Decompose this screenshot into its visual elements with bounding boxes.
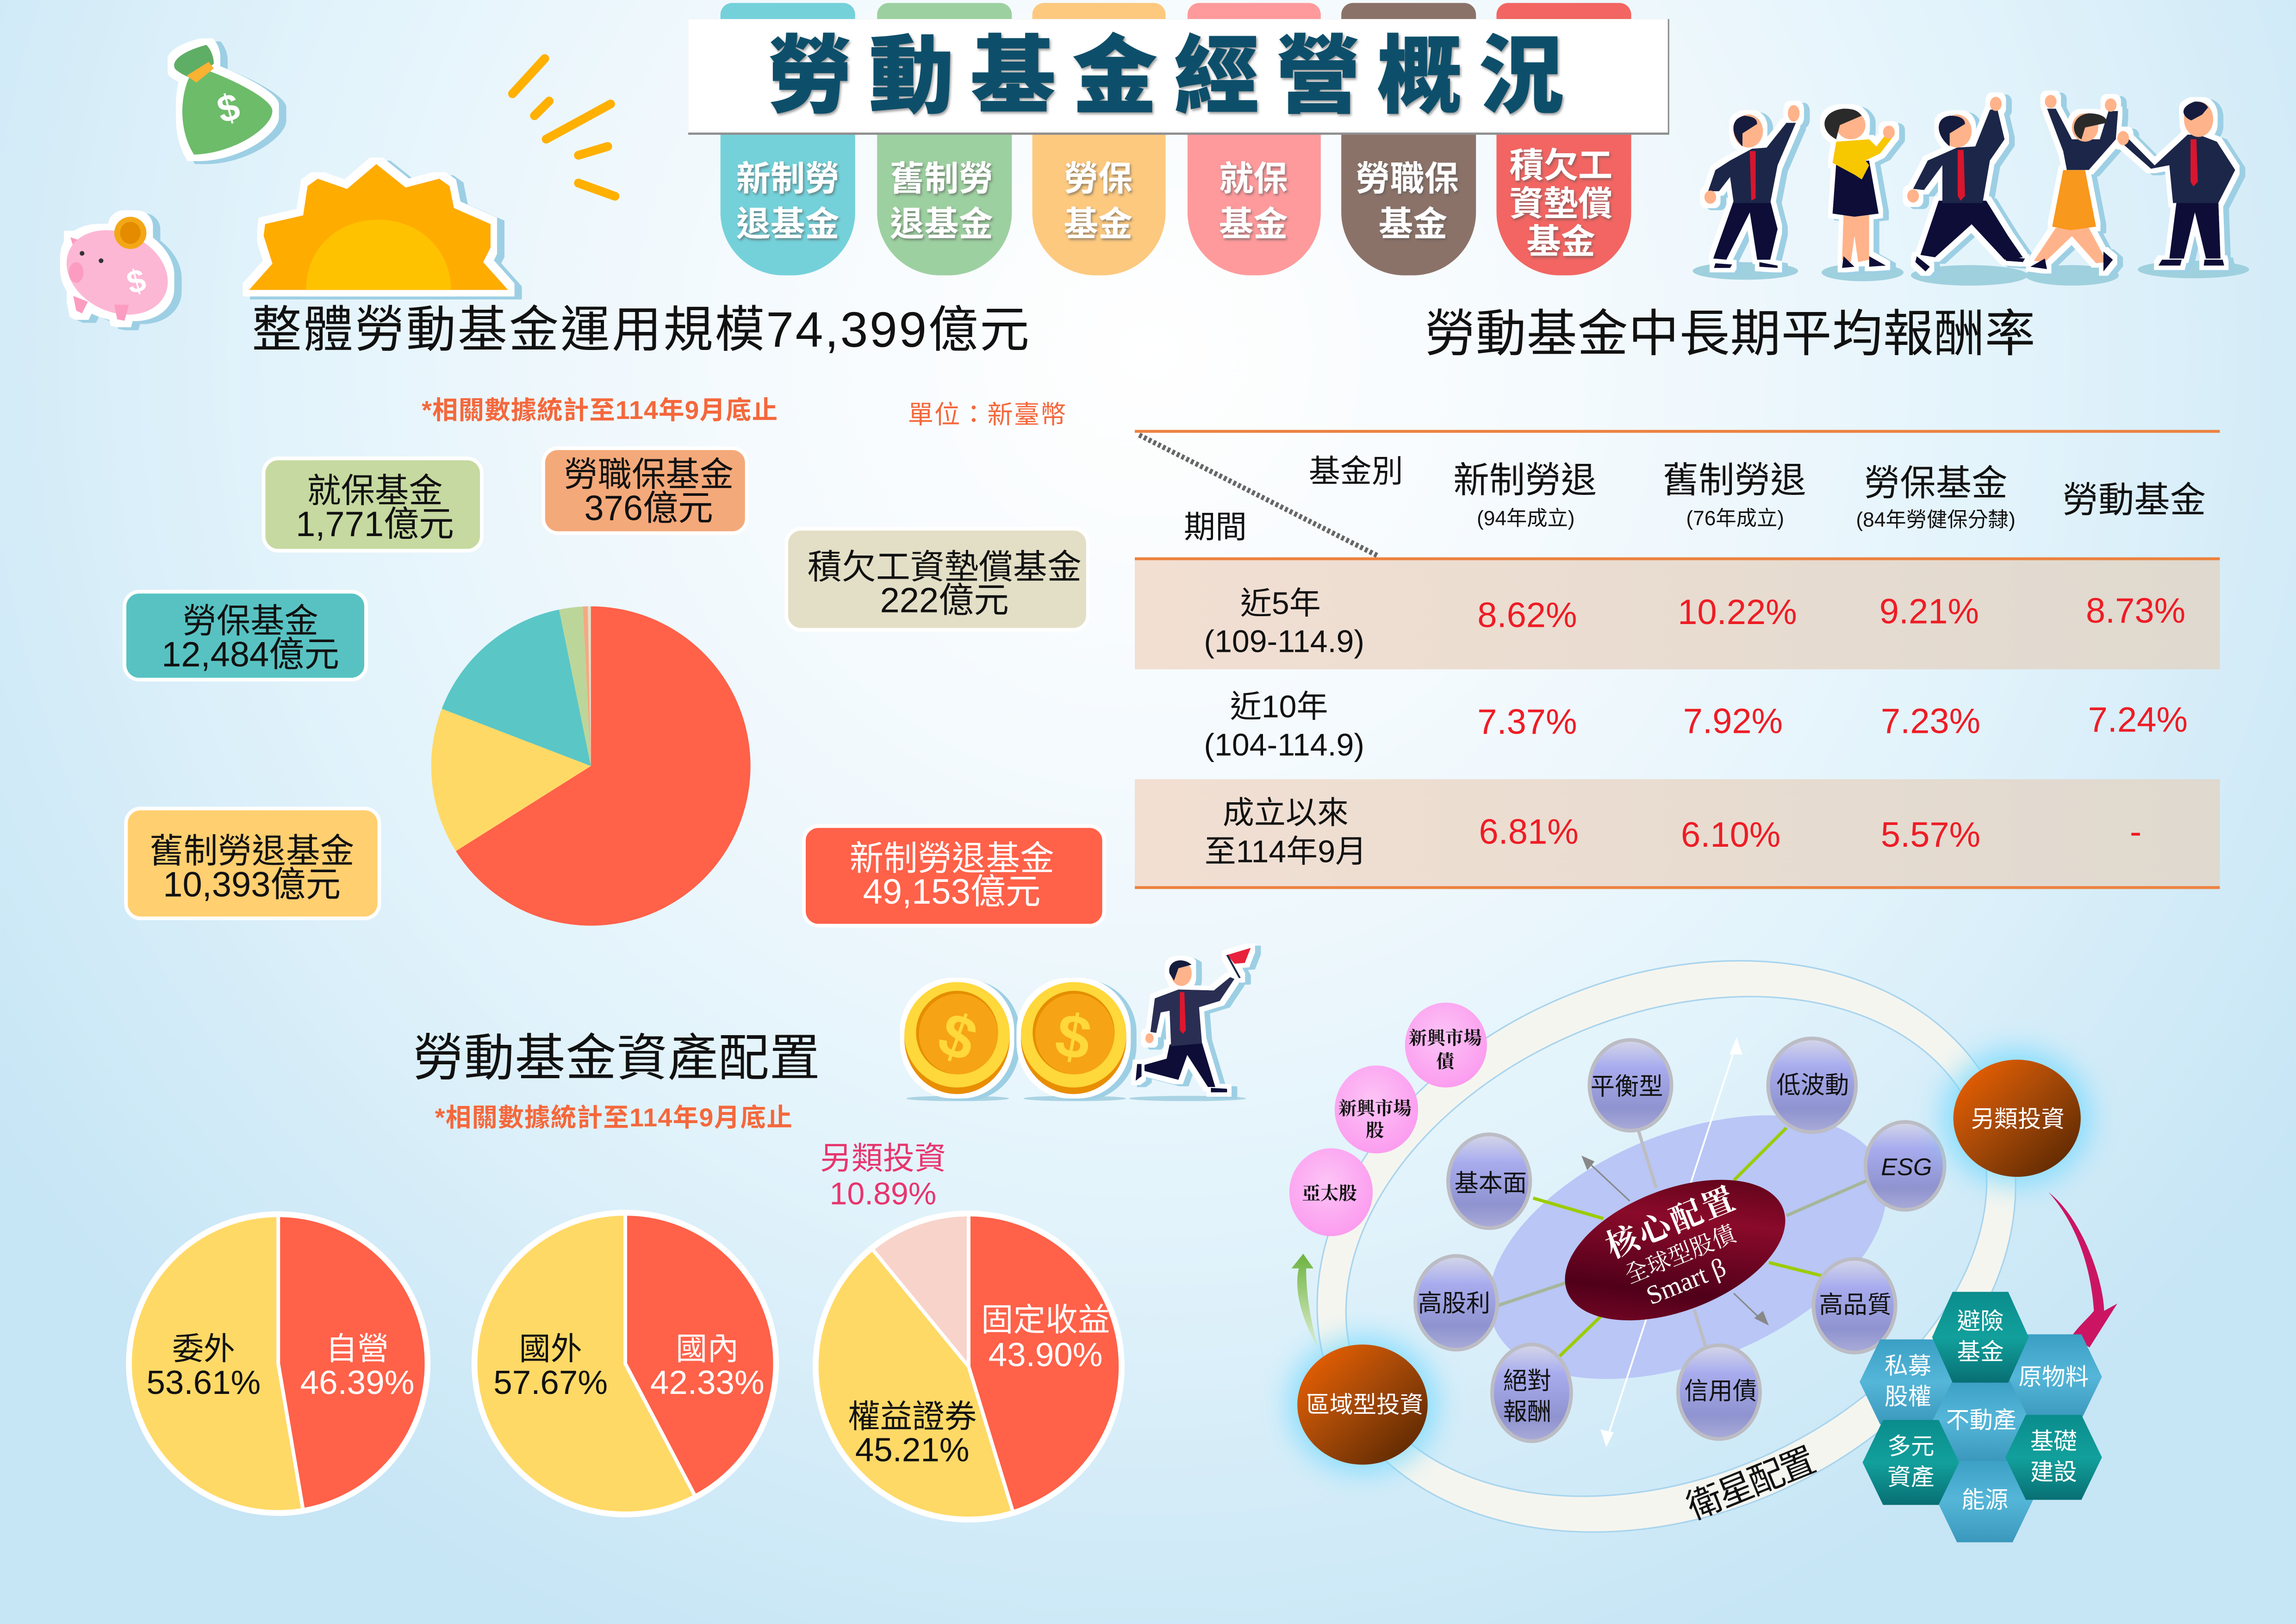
tab: old pension: 舊制勞: [890, 159, 993, 198]
callout: alternative investment share: [820, 1141, 946, 1211]
regional bubbles: 股: [1366, 1120, 1384, 1141]
icon: piggy bank: [53, 214, 182, 331]
sphere labels: 信用債: [1684, 1378, 1757, 1405]
row labels: (109-114.9): [1204, 624, 1364, 659]
label: old pension: 舊制勞退基金: [149, 832, 354, 870]
bubble glow: [1290, 1050, 2090, 1472]
bubble: regional: [1297, 1344, 1428, 1465]
table values: 7.37%: [1477, 702, 1577, 742]
callout: alternative investment share: 10.89%: [830, 1176, 936, 1211]
core ellipse backdrop: [1450, 1063, 1924, 1431]
hexagon cluster: 基金: [1957, 1339, 2004, 1365]
hexagon cluster: 股權: [1885, 1383, 1931, 1410]
label: new pension: 49,153億元: [863, 872, 1041, 912]
label: employment insurance: 1,771億元: [296, 505, 454, 544]
table values: 7.24%: [2088, 700, 2188, 739]
regional bubbles: 新興市場: [1338, 1099, 1412, 1119]
sphere labels: 絕對: [1503, 1368, 1551, 1394]
tab: occupational: 基金: [1379, 205, 1447, 244]
hexagon cluster: 能源: [1961, 1487, 2008, 1513]
table: returns: [1135, 431, 2220, 887]
tab: employment insurance: [1188, 3, 1321, 275]
icon: piggy bank: $: [123, 262, 149, 301]
satellite ring: [1228, 857, 2104, 1624]
table header: (76年成立): [1686, 507, 1784, 530]
label: employment insurance: [264, 458, 482, 551]
pie: asset classes: [815, 1213, 1122, 1519]
table header: 基金別: [1309, 454, 1403, 489]
label: wage arrears: 積欠工資墊償基金: [808, 548, 1082, 586]
bubble: regional: 區域型投資: [1306, 1392, 1423, 1418]
hexagon cluster: 多元: [1887, 1433, 1934, 1460]
pie chart: fund scale: [431, 606, 751, 926]
label: labor insurance: 12,484億元: [162, 635, 339, 675]
coin 2: $: [1051, 1000, 1096, 1074]
pie labels: [848, 1302, 1110, 1469]
sphere labels: 基本面: [1455, 1170, 1527, 1197]
row labels: 至114年9月: [1205, 834, 1367, 869]
sphere labels: 高品質: [1819, 1292, 1892, 1318]
fund tabs: [721, 3, 1631, 275]
pie labels: 42.33%: [650, 1364, 765, 1401]
table header: 勞動基金: [2062, 480, 2206, 520]
table values: 9.21%: [1879, 592, 1979, 631]
connector lines: [1495, 1128, 1867, 1358]
core: 全球型股債: [1621, 1220, 1741, 1288]
callout: alternative investment share: 另類投資: [820, 1141, 946, 1176]
icon: money bag: $: [213, 85, 244, 131]
tab: wage arrears: 基金: [1526, 223, 1595, 261]
label: employment insurance: 就保基金: [307, 472, 443, 510]
hexagon cluster: [1860, 1292, 2102, 1542]
label: new pension: [804, 826, 1104, 926]
core: Smart β: [1642, 1253, 1730, 1311]
arrow: crimson: [2048, 1192, 2117, 1348]
table values: [1477, 591, 2188, 855]
table header: (94年成立): [1477, 507, 1575, 530]
tab: occupational: [1341, 3, 1476, 275]
label: new pension: 新制勞退基金: [849, 839, 1054, 877]
hexagon cluster: 資產: [1887, 1464, 1934, 1490]
core: 核心配置: [1601, 1181, 1742, 1265]
tab: labor insurance: 基金: [1064, 205, 1132, 244]
bubble: alternative: 另類投資: [1971, 1106, 2065, 1132]
icon: sun: [249, 164, 508, 290]
table values: 5.57%: [1881, 815, 1980, 855]
regional bubbles: [1289, 1003, 1487, 1236]
tab: occupational: 勞職保: [1356, 159, 1459, 198]
tab: employment insurance: 就保: [1219, 159, 1288, 198]
icon: coins and running man: [904, 948, 1251, 1101]
pie: domestic vs foreign: [474, 1213, 776, 1514]
table header: 新制勞退: [1453, 461, 1597, 500]
label: occupational: [543, 448, 747, 533]
hexagon cluster: 基礎: [2030, 1428, 2077, 1455]
core: [1545, 1152, 1805, 1348]
diagram: core-satellite allocation: [1228, 857, 2117, 1624]
hexagon cluster: 原物料: [2018, 1363, 2089, 1390]
table header: 期間: [1184, 510, 1247, 545]
tab: new pension: [721, 3, 855, 275]
heading: returns: 勞動基金中長期平均報酬率: [1425, 306, 2035, 362]
label: wage arrears: 222億元: [880, 581, 1009, 620]
table header: [1184, 454, 2206, 545]
table values: 10.22%: [1678, 593, 1797, 632]
heading: asset allocation: 勞動基金資產配置: [413, 1030, 820, 1087]
label: occupational: 376億元: [584, 488, 713, 528]
table header: (84年勞健保分隸): [1856, 509, 2016, 531]
pie labels: 43.90%: [989, 1336, 1102, 1374]
table values: 8.73%: [2086, 591, 2185, 631]
label: labor insurance: 勞保基金: [182, 602, 318, 640]
pie labels: 46.39%: [300, 1364, 414, 1401]
row labels: (104-114.9): [1204, 727, 1364, 762]
table values: 6.10%: [1681, 815, 1780, 855]
icon: money bag: [174, 45, 273, 155]
sphere labels: [1418, 1072, 1932, 1425]
arrows: [1581, 1037, 1769, 1447]
label: old pension: [126, 808, 380, 918]
regional bubbles: 亞太股: [1302, 1183, 1357, 1204]
tab: wage arrears: [1496, 3, 1631, 275]
pie labels: 53.61%: [146, 1364, 261, 1401]
pie labels: 自營: [326, 1331, 389, 1367]
man 2: [1920, 201, 2023, 260]
hexagon cluster: 避險: [1957, 1308, 2004, 1334]
title banner: [688, 19, 1669, 135]
hexagon cluster: 建設: [2030, 1459, 2077, 1485]
tab: old pension: [877, 3, 1012, 275]
title: 勞動基金經營概況: [767, 29, 1564, 124]
woman 1: [1842, 215, 1869, 262]
tab: old pension: 退基金: [890, 205, 993, 244]
sphere labels: 報酬: [1503, 1399, 1551, 1425]
row labels: [1204, 586, 1367, 869]
woman 2: [2034, 228, 2107, 263]
hexagon cluster: 不動產: [1946, 1407, 2016, 1433]
arrow: green: [1292, 1254, 1319, 1350]
sphere labels: ESG: [1881, 1154, 1932, 1181]
pie labels: 國內: [676, 1331, 739, 1367]
tab: new pension: 新制勞: [736, 159, 840, 198]
bubble: alternative: [1954, 1060, 2081, 1177]
sphere labels: 平衡型: [1591, 1074, 1663, 1100]
tab: new pension: 退基金: [736, 205, 840, 244]
regional bubbles: 新興市場: [1409, 1028, 1482, 1049]
icon: sun rays: [512, 59, 615, 196]
tab: labor insurance: 勞保: [1064, 159, 1132, 198]
label: wage arrears: [786, 529, 1088, 630]
pie labels: 國外: [519, 1331, 582, 1367]
coin 1: $: [930, 999, 985, 1075]
pie: self vs outsourced: [129, 1214, 428, 1513]
tab: employment insurance: 基金: [1219, 205, 1288, 244]
illustration: celebrating business people: [1692, 95, 2249, 286]
regional bubbles: 債: [1436, 1052, 1457, 1072]
satellite label: 衛星配置: [1681, 1440, 1821, 1527]
label: occupational: 勞職保基金: [564, 456, 734, 493]
row labels: 近5年: [1240, 586, 1321, 621]
tab: wage arrears: 資墊償: [1509, 184, 1612, 223]
row labels: 成立以來: [1223, 795, 1349, 831]
man 3: [2169, 201, 2221, 258]
table header: 勞保基金: [1864, 463, 2008, 503]
note: asset data date: *相關數據統計至114年9月底止: [435, 1103, 792, 1132]
hexagon cluster: 私募: [1885, 1353, 1931, 1379]
pie labels: [146, 1331, 414, 1401]
man 1: [1713, 201, 1778, 260]
label: labor insurance: [124, 592, 366, 680]
note: unit: 單位：新臺幣: [908, 400, 1066, 429]
table header: 舊制勞退: [1663, 461, 1806, 500]
table values: 7.23%: [1881, 702, 1980, 741]
running man with flag: [1136, 948, 1251, 1092]
pie labels: 57.67%: [493, 1364, 608, 1401]
pie labels: 固定收益: [981, 1302, 1110, 1338]
row labels: 近10年: [1230, 689, 1328, 725]
table values: 7.92%: [1683, 702, 1783, 741]
heading: overall scale: 整體勞動基金運用規模74,399億元: [252, 302, 1029, 357]
coin 1: [904, 982, 1010, 1094]
tab: wage arrears: 積欠工: [1509, 146, 1612, 185]
pie labels: 45.21%: [855, 1431, 970, 1469]
table values: -: [2130, 812, 2141, 852]
label: old pension: 10,393億元: [163, 865, 341, 904]
table values: 8.62%: [1477, 595, 1577, 635]
coin 2: [1021, 982, 1126, 1094]
table values: 6.81%: [1479, 812, 1579, 852]
sphere labels: 高股利: [1418, 1290, 1490, 1317]
tab: labor insurance: [1033, 3, 1165, 275]
spheres: [1415, 1038, 1945, 1441]
sphere labels: 低波動: [1777, 1072, 1849, 1099]
note: data date: *相關數據統計至114年9月底止: [422, 396, 778, 425]
pie labels: [493, 1331, 765, 1401]
pie labels: 權益證券: [848, 1398, 977, 1434]
pie labels: 委外: [172, 1331, 235, 1367]
